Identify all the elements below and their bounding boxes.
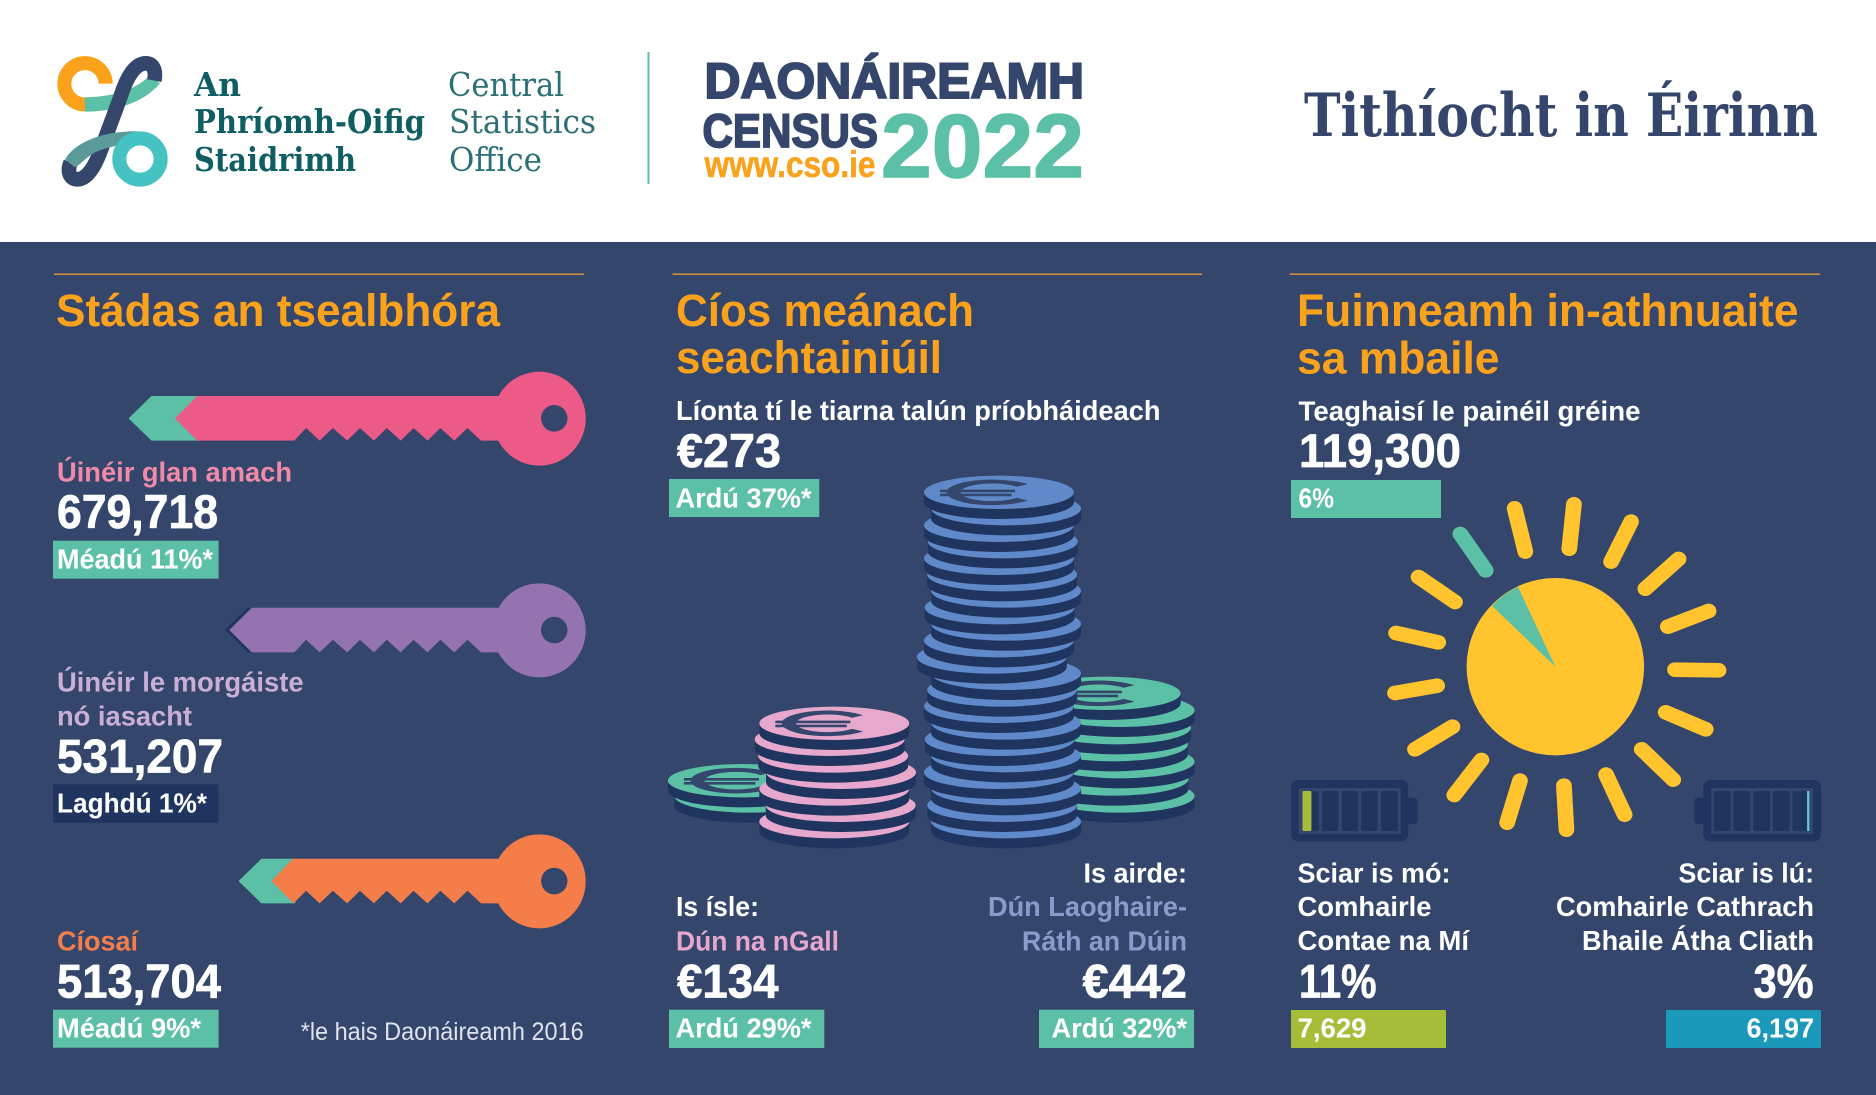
Irish office name: Phríomh-Oifig — [194, 102, 425, 141]
smallest share block: Bhaile Átha Cliath — [1582, 925, 1814, 956]
lowest rent block: Is ísle: — [676, 891, 759, 922]
panel: tenure status — [53, 274, 586, 1048]
highest rent block: €442 — [1082, 955, 1187, 1008]
icon: orange key — [239, 834, 586, 928]
highest rent block — [988, 857, 1194, 1048]
owner outright badge: Méadú 11%* — [57, 543, 213, 574]
heading: energy: sa mbaile — [1297, 332, 1500, 383]
private landlord label: Líonta tí le tiarna talún príobháideach — [676, 395, 1160, 426]
largest share block: 7,629 — [1298, 1013, 1366, 1044]
smallest share block: Sciar is lú: — [1678, 857, 1814, 888]
highest rent block: Is airde: — [1084, 857, 1187, 888]
heading: rent: Cíos meánach — [676, 285, 974, 336]
footnote: *le hais Daonáireamh 2016 — [301, 1018, 584, 1046]
solar panel badge — [1291, 480, 1441, 518]
chart: coin stacks — [668, 476, 1195, 848]
private landlord badge: Ardú 37%* — [676, 483, 812, 514]
English office name: Central — [448, 65, 564, 104]
largest share block: Comhairle — [1298, 891, 1432, 922]
census 2022 logo — [702, 53, 1084, 197]
mortgage owner number: 531,207 — [57, 729, 223, 782]
largest share block: 11% — [1299, 955, 1376, 1008]
sun disc — [1467, 578, 1644, 755]
highest rent block: Dún Laoghaire- — [988, 891, 1187, 922]
smallest share block: Comhairle Cathrach — [1556, 891, 1814, 922]
Irish office name — [193, 65, 425, 179]
mortgage owner label: Úinéir le morgáiste — [57, 666, 304, 697]
icon: nearly empty battery right — [1694, 780, 1821, 841]
heading: rent — [676, 285, 974, 383]
largest share block — [1291, 857, 1470, 1048]
icon: purple key — [225, 583, 586, 677]
English office name — [448, 65, 596, 179]
solar panel label: Teaghaisí le painéil gréine — [1298, 396, 1640, 427]
sun rays — [1395, 504, 1719, 830]
largest share block: Contae na Mí — [1298, 925, 1470, 956]
smallest share block: 6,197 — [1746, 1013, 1814, 1044]
smallest share block: 3% — [1754, 955, 1814, 1008]
chart: sun pie — [1395, 504, 1719, 830]
census 2022 logo: www.cso.ie — [704, 144, 876, 185]
heading: rent: seachtainiúil — [676, 332, 942, 383]
heading: energy — [1297, 285, 1798, 383]
icon: CSO logo mark — [64, 63, 161, 180]
renters number: 513,704 — [57, 955, 221, 1008]
small green stack — [668, 764, 824, 823]
icon: nearly empty battery left — [1291, 780, 1417, 841]
highest rent block: Ráth an Dúin — [1022, 926, 1187, 957]
owner outright number: 679,718 — [57, 485, 218, 538]
mortgage owner label: nó iasacht — [57, 700, 192, 731]
Irish office name: An — [193, 65, 241, 104]
right green stack — [1031, 677, 1195, 823]
pink stack — [755, 707, 916, 848]
census 2022 logo: DAONÁIREAMH — [704, 53, 1084, 109]
owner outright label: Úinéir glan amach — [57, 457, 292, 488]
heading: energy: Fuinneamh in-athnuaite — [1297, 285, 1798, 336]
census 2022 logo: CENSUS — [702, 104, 878, 157]
panel: average weekly rent — [668, 274, 1202, 1048]
solar panel number: 119,300 — [1299, 424, 1461, 477]
solar panel badge: 6% — [1298, 482, 1334, 513]
largest share block: Sciar is mó: — [1298, 857, 1450, 888]
private landlord number: €273 — [677, 424, 781, 477]
English office name: Statistics — [449, 102, 596, 141]
Irish office name: Staidrimh — [194, 140, 356, 179]
mortgage owner badge: Laghdú 1%* — [57, 787, 207, 818]
blue stack — [917, 476, 1081, 848]
highest rent block: Ardú 32%* — [1052, 1013, 1187, 1044]
lowest rent block: Ardú 29%* — [676, 1013, 812, 1044]
smallest share block — [1556, 857, 1821, 1048]
pie slice 6% — [1492, 587, 1555, 667]
lowest rent block: €134 — [677, 955, 778, 1008]
lowest rent block — [669, 891, 839, 1048]
English office name: Office — [449, 140, 542, 179]
header band — [0, 0, 1876, 242]
panel: renewable energy — [1290, 274, 1821, 1048]
census 2022 logo: 2022 — [881, 97, 1084, 197]
icon: pink key — [129, 372, 586, 466]
renters label: Cíosaí — [57, 926, 139, 957]
renters badge: Méadú 9%* — [57, 1013, 201, 1044]
mortgage owner label — [57, 666, 304, 731]
heading: tenure: Stádas an tsealbhóra — [56, 285, 501, 336]
lowest rent block: Dún na nGall — [676, 926, 839, 957]
